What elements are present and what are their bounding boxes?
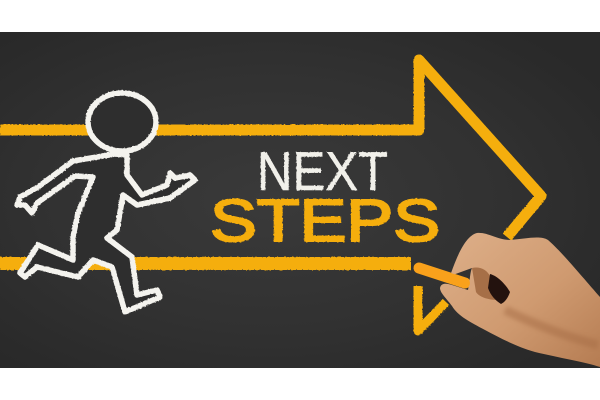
finger gap xyxy=(488,274,510,304)
runner figure xyxy=(17,93,195,312)
icon: hand holding chalk xyxy=(419,233,600,367)
arrow xyxy=(0,60,541,331)
heading: NEXT: NEXT xyxy=(257,140,388,202)
runner head xyxy=(88,93,156,151)
heading: STEPS: STEPS xyxy=(210,188,440,254)
palm shading xyxy=(505,310,598,345)
runner body xyxy=(17,154,195,312)
chalk tip xyxy=(444,276,465,283)
chalk xyxy=(419,268,465,283)
hand xyxy=(440,233,600,367)
middle fingers xyxy=(472,267,498,300)
